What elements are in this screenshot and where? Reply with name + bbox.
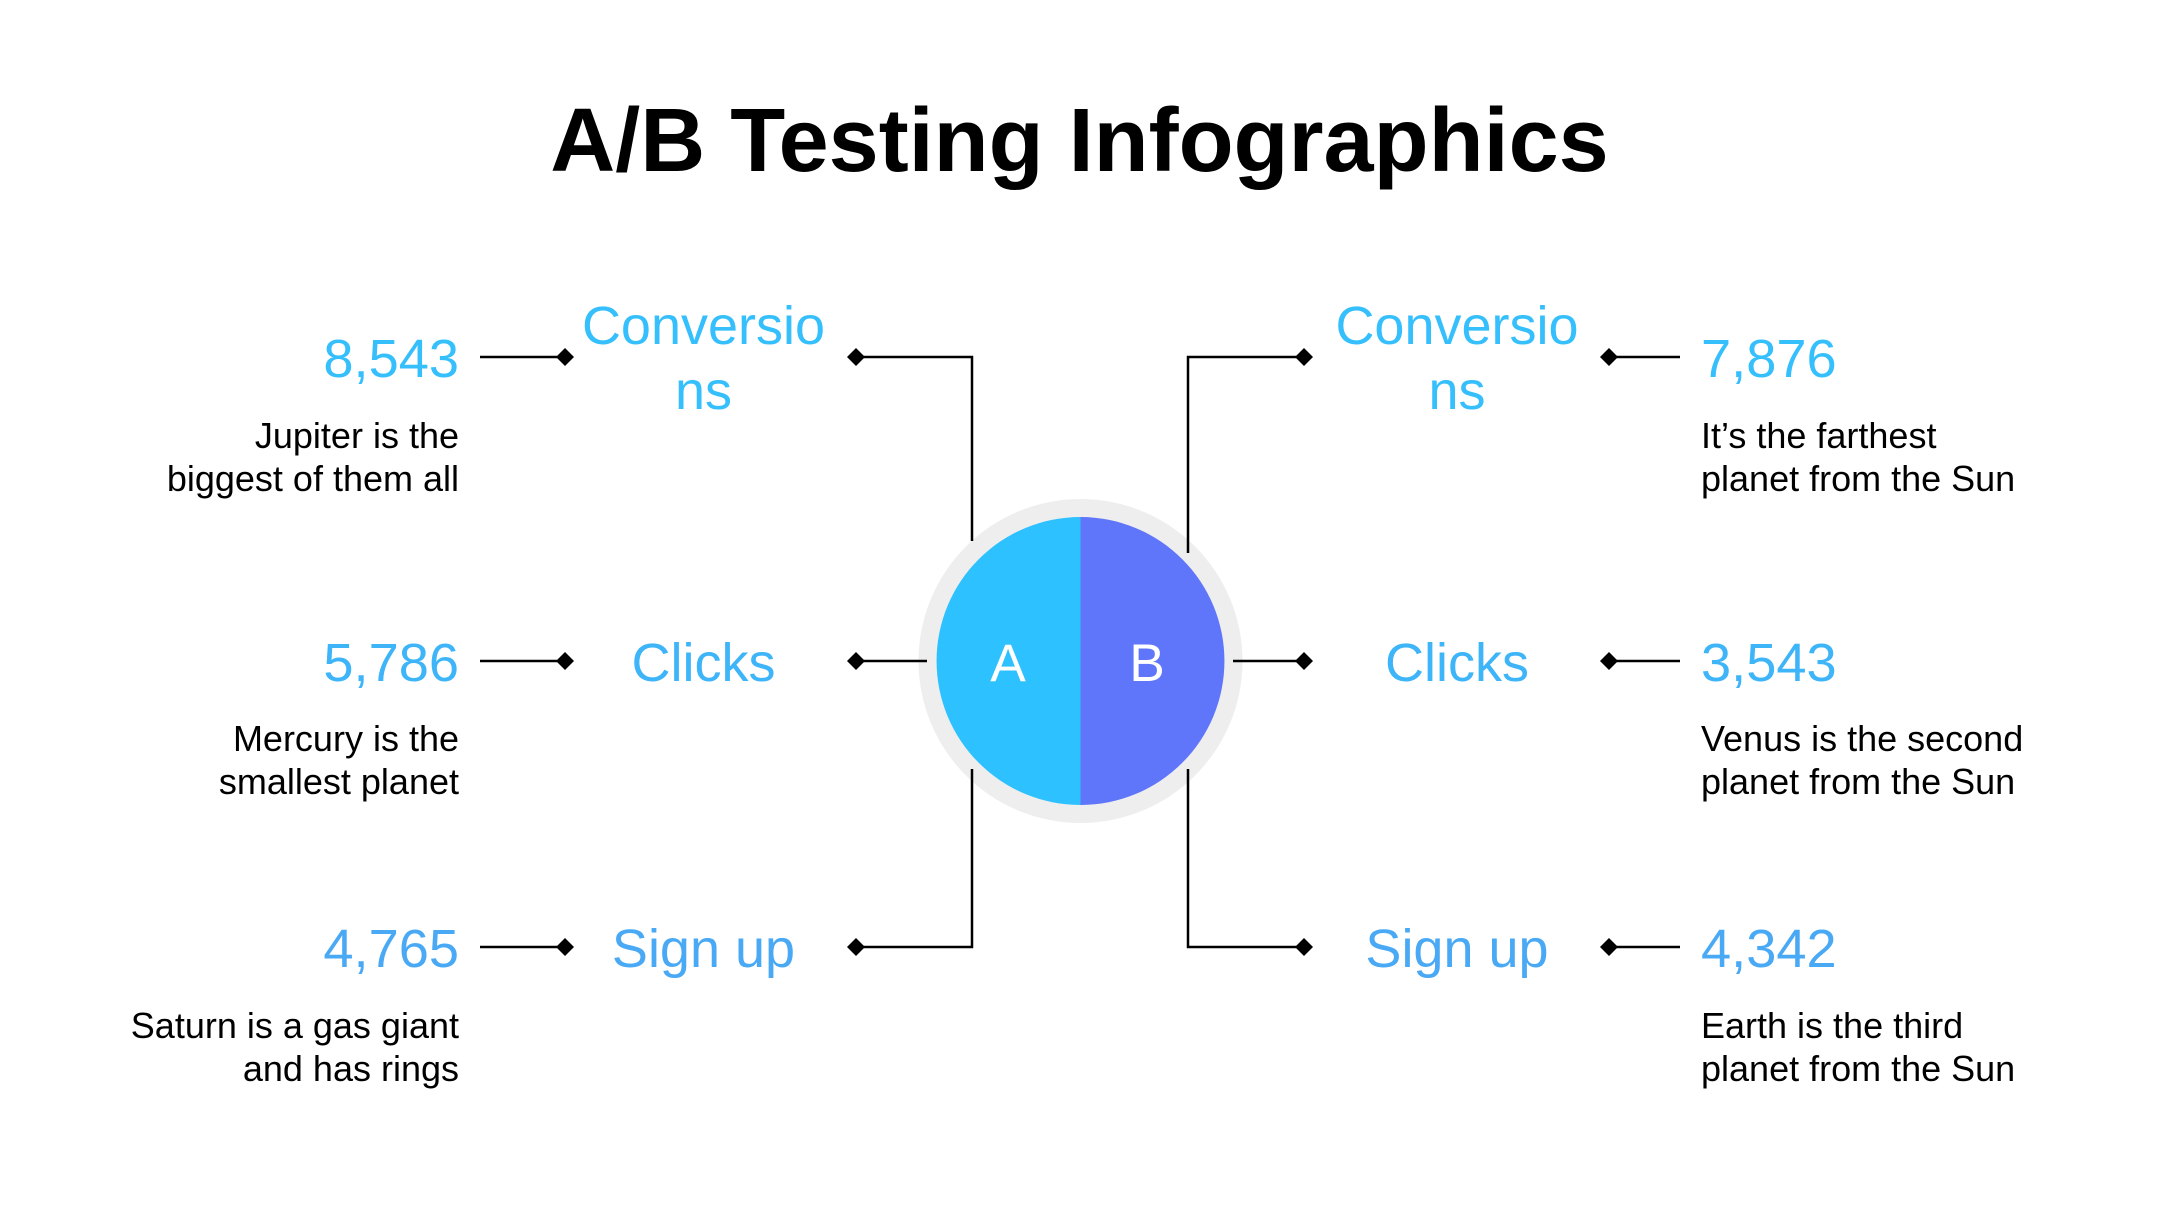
value 4,765: 4,765: [323, 918, 459, 978]
label conversions left: Conversio: [582, 296, 825, 356]
label sign up left: Sign up: [612, 919, 795, 979]
description: planet from the Sun: [1701, 761, 2015, 802]
value 3,543: 3,543: [1701, 632, 1837, 692]
description: Venus is the second: [1701, 718, 2023, 759]
diamonds: [556, 348, 1618, 956]
value 4,342: 4,342: [1701, 918, 1837, 978]
label conversions right: Conversio: [1335, 296, 1579, 356]
circle A/B: [918, 499, 1242, 823]
description: smallest planet: [219, 761, 459, 802]
description: Mercury is the: [233, 718, 459, 759]
value 8,543: 8,543: [323, 328, 459, 388]
description: planet from the Sun: [1701, 1048, 2015, 1089]
description: Saturn is a gas giant: [131, 1005, 459, 1046]
label clicks left: Clicks: [632, 633, 776, 693]
value 7,876: 7,876: [1701, 328, 1837, 388]
label conversions left: [582, 296, 825, 421]
title: A/B Testing Infographics: [550, 90, 1609, 190]
description: Jupiter is the: [255, 415, 459, 456]
description: and has rings: [243, 1048, 459, 1089]
description: [131, 1005, 459, 1089]
label conversions right: ns: [1428, 361, 1486, 421]
description: [1701, 415, 2015, 499]
description: biggest of them all: [167, 458, 459, 499]
description: It’s the farthest: [1701, 415, 1936, 456]
description: Earth is the third: [1701, 1005, 1963, 1046]
description: planet from the Sun: [1701, 458, 2015, 499]
label clicks right: Clicks: [1385, 633, 1529, 693]
description: [1701, 1005, 2015, 1089]
label sign up right: Sign up: [1365, 919, 1549, 979]
letter B: B: [1129, 634, 1165, 693]
label conversions right: [1335, 296, 1579, 421]
description: [1701, 718, 2023, 802]
connectors left: [480, 357, 972, 947]
description: [219, 718, 459, 802]
value 5,786: 5,786: [323, 632, 459, 692]
description: [167, 415, 459, 499]
label conversions left: ns: [675, 361, 732, 421]
connectors right: [1188, 357, 1680, 947]
letter A: A: [990, 634, 1026, 693]
